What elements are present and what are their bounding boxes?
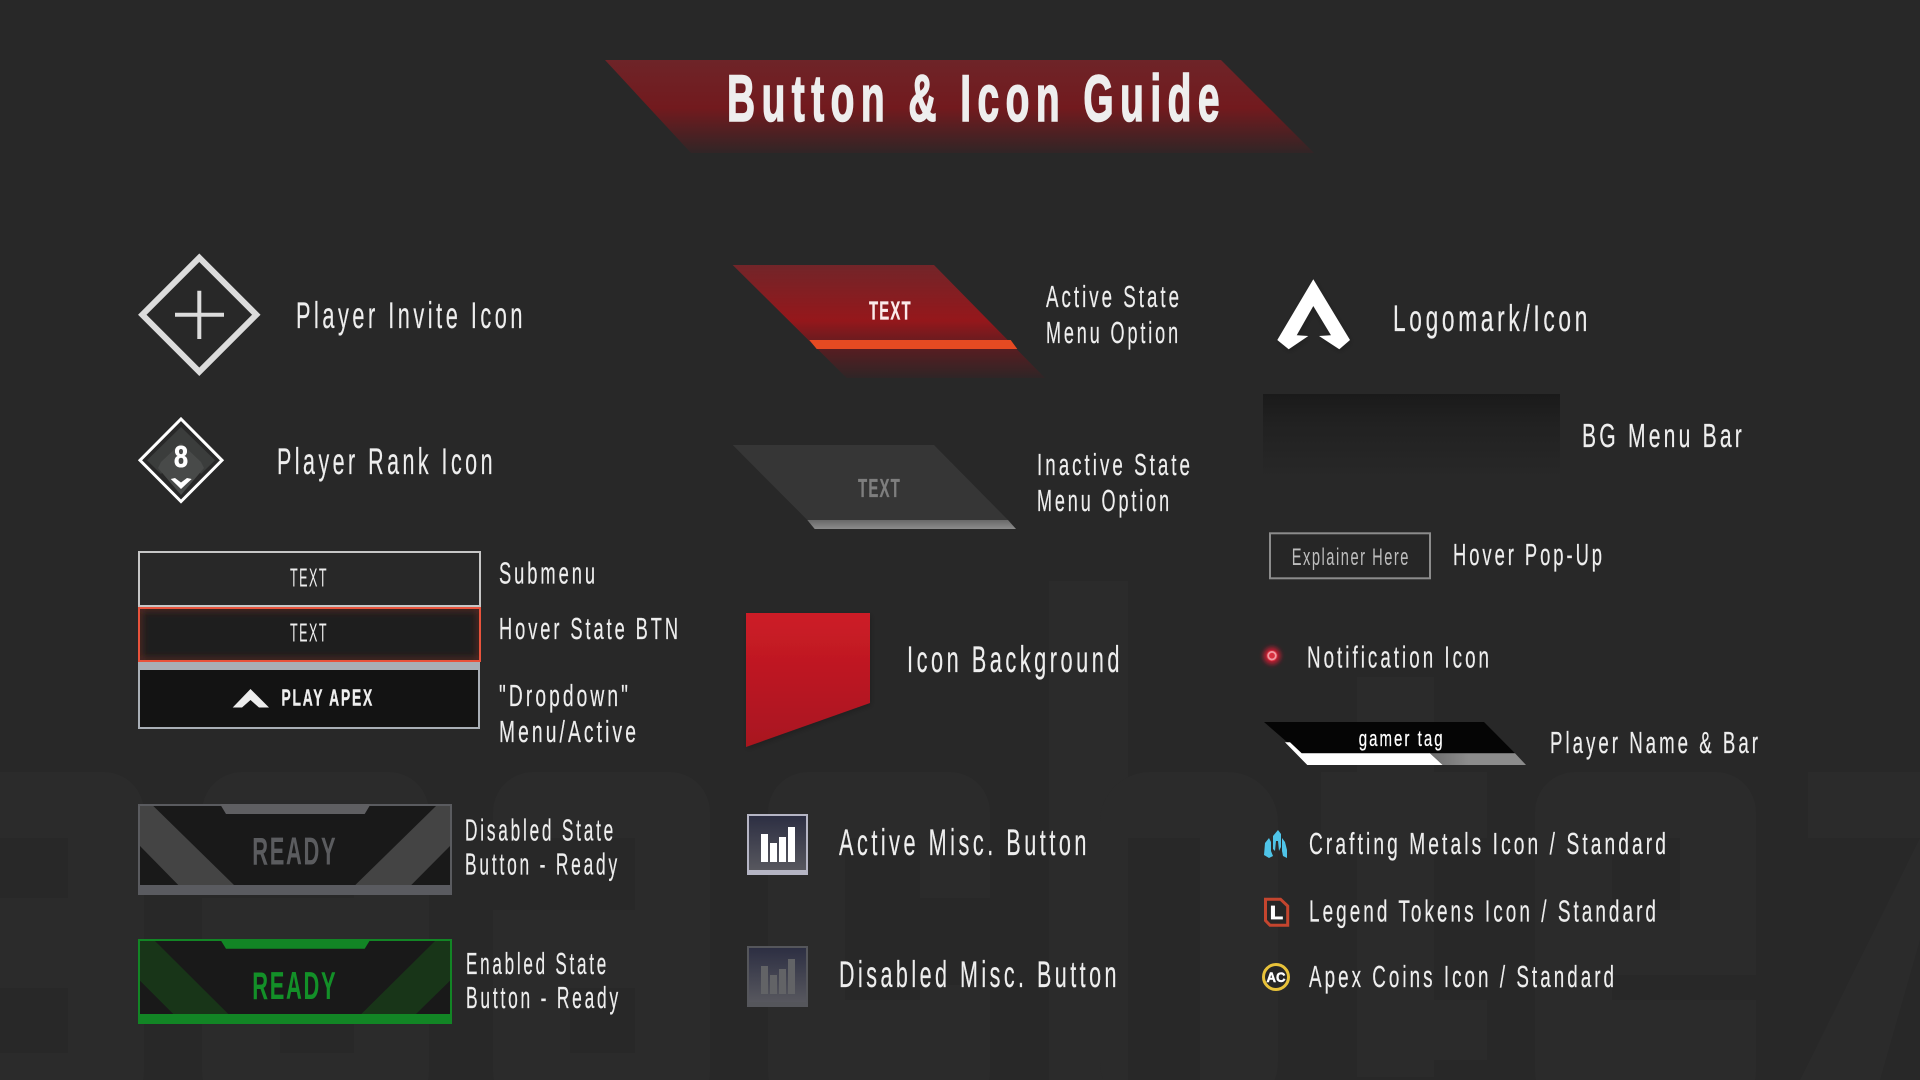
icon: notification dot xyxy=(1264,647,1280,664)
button text: TEXT xyxy=(869,296,912,326)
red parallelogram xyxy=(733,265,1045,378)
icon: rank diamond xyxy=(140,419,222,502)
label: active state: Menu Option xyxy=(1046,315,1181,350)
button frame xyxy=(139,552,480,606)
label: legend tokens: Legend Tokens Icon / Standard xyxy=(1309,894,1659,928)
button text: TEXT xyxy=(858,473,901,503)
label: dropdown: "Dropdown" xyxy=(499,678,631,713)
white progress xyxy=(1285,742,1443,765)
top notch xyxy=(220,804,371,814)
label: dropdown xyxy=(499,678,639,749)
button body xyxy=(139,940,451,1023)
icon: crafting metals xyxy=(1264,830,1287,858)
title banner xyxy=(605,60,1314,153)
top bar xyxy=(138,662,480,670)
icon: bars xyxy=(761,959,795,994)
label: disabled state xyxy=(465,812,620,882)
label: hover pop-up: Hover Pop-Up xyxy=(1453,537,1605,572)
hover state button: TEXT xyxy=(290,618,328,648)
button text: READY xyxy=(252,965,337,1008)
button body xyxy=(139,663,479,728)
label: dropdown: Menu/Active xyxy=(499,714,639,749)
player rank icon row xyxy=(140,419,496,502)
label: Player Invite Icon xyxy=(296,295,526,336)
diagonal bands xyxy=(140,941,450,1014)
icon: apex coins xyxy=(1264,964,1288,990)
banner shape xyxy=(605,60,1314,153)
bottom bar xyxy=(138,885,452,895)
pop-up text: Explainer Here xyxy=(1292,544,1410,571)
label: icon background: Icon Background xyxy=(907,639,1123,680)
grey remainder xyxy=(1430,753,1526,765)
label: active state: Active State xyxy=(1046,279,1182,314)
enabled ready button xyxy=(138,939,452,1024)
active misc button xyxy=(747,815,808,875)
grey parallelogram xyxy=(733,445,1008,520)
icon: rank diamond: 8 xyxy=(174,439,188,474)
label: bg menu bar: BG Menu Bar xyxy=(1582,417,1745,454)
label: inactive state: Inactive State xyxy=(1037,447,1193,482)
hover pop-up xyxy=(1270,533,1430,578)
label: inactive state xyxy=(1037,447,1193,518)
diagonal bands xyxy=(140,806,450,885)
play apex dropdown button xyxy=(138,662,480,728)
bottom bar xyxy=(747,870,808,875)
orange underline xyxy=(809,340,1017,349)
icon: invite diamond with plus xyxy=(142,258,256,372)
label: disabled state: Button - Ready xyxy=(465,846,620,882)
icon: chevron xyxy=(233,689,269,708)
label: apex coins: Apex Coins Icon / Standard xyxy=(1309,959,1617,994)
icon: legend tokens: L xyxy=(1270,903,1283,923)
label: Player Rank Icon xyxy=(277,441,496,482)
black plate xyxy=(1264,722,1515,753)
label: player name: Player Name & Bar xyxy=(1550,725,1761,760)
title text: Button & Icon Guide xyxy=(727,61,1226,135)
icon: apex logomark xyxy=(1277,279,1350,349)
disabled ready button xyxy=(138,804,452,895)
button border xyxy=(139,608,480,661)
label: logomark: Logomark/Icon xyxy=(1393,298,1591,339)
label: active misc: Active Misc. Button xyxy=(839,822,1090,863)
label: disabled misc: Disabled Misc. Button xyxy=(839,954,1120,995)
button tile xyxy=(748,815,807,874)
bottom bar xyxy=(138,1014,452,1024)
player invite icon row xyxy=(142,258,526,372)
button tile xyxy=(748,947,807,1006)
inactive menu option xyxy=(733,445,1016,529)
inner glow xyxy=(139,608,480,661)
disabled misc button xyxy=(747,947,808,1007)
label: active state xyxy=(1046,279,1182,350)
label: notification: Notification Icon xyxy=(1307,640,1492,674)
player name bar xyxy=(1264,722,1526,765)
button text: READY xyxy=(252,830,337,874)
pop-up frame xyxy=(1270,533,1430,578)
button fill xyxy=(139,608,480,661)
label: crafting metals: Crafting Metals Icon / Standard xyxy=(1309,826,1669,861)
bg menu bar xyxy=(1263,394,1560,479)
icon: legend tokens xyxy=(1266,899,1288,925)
label: enabled state: Enabled State xyxy=(466,946,609,981)
hover state button xyxy=(139,608,480,661)
label: hover state: Hover State BTN xyxy=(499,611,681,646)
top notch xyxy=(220,939,371,949)
submenu button xyxy=(139,552,480,606)
label: enabled state: Button - Ready xyxy=(466,980,621,1015)
gamer tag text: gamer tag xyxy=(1359,726,1445,751)
label: disabled state: Disabled State xyxy=(465,812,616,848)
icon background swatch xyxy=(746,613,870,747)
label: inactive state: Menu Option xyxy=(1037,483,1172,518)
bottom bar xyxy=(747,1002,808,1007)
submenu button: TEXT xyxy=(290,562,328,592)
label: enabled state xyxy=(466,946,621,1015)
button body xyxy=(139,805,451,894)
label: submenu: Submenu xyxy=(499,556,598,590)
icon: bars xyxy=(761,827,795,862)
background watermark lettering xyxy=(0,581,1920,1080)
grey underline xyxy=(807,520,1016,529)
icon: apex coins: AC xyxy=(1266,969,1286,985)
button text: PLAY APEX xyxy=(282,684,374,710)
active menu option xyxy=(733,265,1045,378)
